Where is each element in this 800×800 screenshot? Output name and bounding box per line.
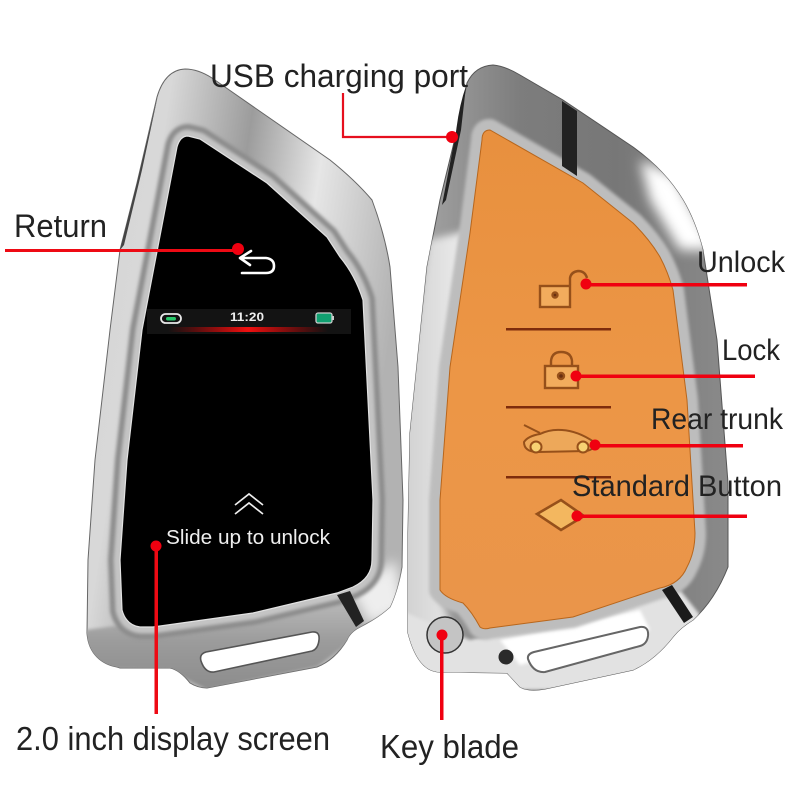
bottom seam [662, 585, 693, 623]
callout: lock [570, 370, 755, 382]
left fob bezel light ring [120, 136, 373, 627]
label: Unlock: Unlock [697, 246, 786, 279]
display screen [120, 136, 373, 627]
right key fob [400, 65, 728, 690]
metal highlights [350, 560, 405, 625]
leather panel [440, 130, 695, 629]
up chevrons [235, 494, 263, 514]
left fob metal body [87, 69, 403, 688]
red glow bar [168, 327, 328, 332]
left fob lower plate [85, 560, 405, 690]
divider [506, 476, 611, 478]
right fob metal body [408, 65, 728, 690]
status bar [147, 309, 351, 334]
divider [506, 406, 611, 408]
right fob clipped shading [400, 160, 715, 690]
left fob side shadow [120, 95, 158, 250]
right fob ring [440, 130, 695, 629]
battery icon [316, 313, 332, 323]
trunk icon [524, 425, 594, 452]
callout: rear trunk [590, 440, 743, 450]
time: 11:20 [230, 312, 264, 324]
white highlight upper right [640, 160, 715, 250]
left fob key ring slot [201, 632, 319, 672]
bottom plate [400, 590, 700, 690]
unlock icon [540, 271, 587, 307]
screen text: Slide up to unlock [166, 527, 331, 549]
callout: key blade [436, 630, 448, 720]
callout: return [5, 243, 244, 255]
right fob key ring slot [528, 627, 648, 672]
callout: display screen [150, 540, 162, 714]
left fob screen bezel [120, 136, 373, 627]
key blade button [427, 617, 463, 653]
lock icon [545, 352, 578, 388]
top seam [562, 101, 577, 176]
divider [506, 328, 611, 330]
label: Return: Return [14, 208, 107, 244]
return arrow icon [240, 251, 274, 273]
label: Rear trunk: Rear trunk [651, 403, 784, 436]
diamond icon [537, 500, 584, 530]
callout: standard button [572, 510, 747, 522]
label: 2.0 inch display screen: 2.0 inch display screen [16, 720, 330, 757]
left key fob [85, 69, 405, 690]
small screw [498, 650, 514, 664]
right fob charging edge [442, 86, 466, 205]
label: USB charging port: USB charging port [210, 58, 468, 94]
callout: USB port [343, 93, 458, 143]
label: Lock: Lock [722, 334, 781, 367]
label: Standard Button: Standard Button [572, 470, 782, 503]
callout: unlock [580, 278, 747, 290]
left status pill [161, 314, 181, 323]
left light band [408, 228, 468, 672]
bottom right highlight [500, 610, 650, 665]
label: Key blade: Key blade [380, 728, 519, 765]
left fob seam [337, 591, 364, 627]
